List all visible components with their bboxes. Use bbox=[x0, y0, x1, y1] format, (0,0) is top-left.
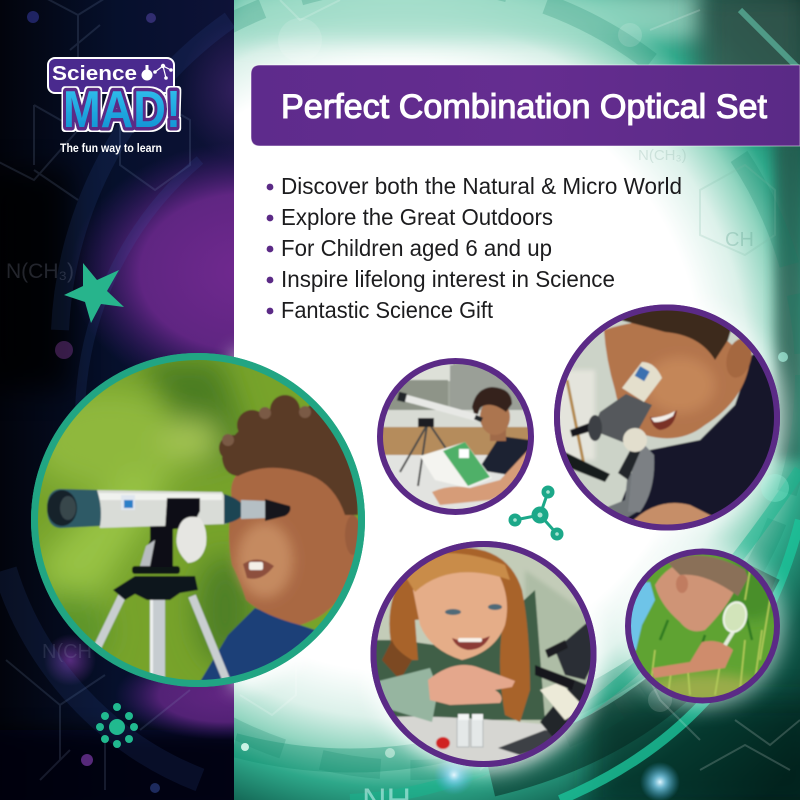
tripod bbox=[400, 425, 447, 486]
microscope bbox=[498, 622, 590, 756]
vials bbox=[457, 719, 469, 747]
logo MAD! wordmark: MAD! bbox=[63, 81, 181, 139]
boy: ear bbox=[345, 514, 358, 554]
sweater bbox=[621, 354, 774, 520]
boy: mouth bbox=[243, 559, 274, 579]
magnifying glass bbox=[725, 632, 733, 645]
table bbox=[396, 715, 547, 761]
panel: glowing right background: N(CH₃) bbox=[638, 147, 687, 164]
booklet bbox=[420, 442, 492, 488]
head bbox=[655, 560, 735, 631]
hand bbox=[428, 665, 515, 705]
photo: boy with magnifying glass in grass bbox=[626, 548, 785, 706]
arm bbox=[652, 641, 733, 678]
ghost formula: N(CH3): N(CH₃) bbox=[6, 260, 74, 283]
photo: boy looking through microscope bbox=[554, 300, 784, 535]
telescope bbox=[398, 396, 478, 418]
boy: hair bbox=[219, 395, 361, 515]
bullet: age: For Children aged 6 and up bbox=[281, 235, 552, 261]
shirt bbox=[631, 580, 656, 652]
red sample bbox=[436, 737, 450, 749]
tagline: The fun way to learn bbox=[60, 143, 162, 155]
back hair bbox=[389, 548, 530, 722]
bullet: natural and micro world: Discover both the Natural & Micro World bbox=[281, 173, 682, 199]
telescope bbox=[47, 489, 290, 563]
mouth bbox=[650, 410, 677, 430]
panel: dark left background bbox=[0, 0, 234, 800]
panel: glowing right background bbox=[234, 0, 800, 800]
face bbox=[604, 320, 750, 438]
bullet: lifelong interest: Inspire lifelong interest in Science bbox=[281, 266, 615, 292]
reader arm bbox=[432, 450, 534, 505]
boy: neck and face bbox=[229, 459, 358, 625]
photo: boy with telescope at table bbox=[378, 358, 540, 515]
white halos behind photo circles bbox=[220, 320, 800, 787]
boy: shirt bbox=[200, 608, 315, 680]
icon: green star bbox=[64, 263, 124, 323]
bullet: gift: Fantastic Science Gift bbox=[281, 297, 494, 323]
boy bbox=[471, 386, 528, 476]
sweater bbox=[375, 590, 545, 720]
title text: Perfect Combination Optical Set bbox=[281, 88, 768, 126]
tripod bbox=[97, 525, 228, 686]
photo: boy with telescope bbox=[30, 350, 370, 690]
bullet list bbox=[267, 173, 682, 323]
ghost formula: N(CH: N(CH bbox=[42, 641, 92, 663]
bullet: great outdoors: Explore the Great Outdoors bbox=[281, 204, 553, 230]
hair bbox=[620, 310, 732, 360]
ear bbox=[726, 338, 753, 378]
photo: girl with microscope bbox=[370, 541, 600, 767]
logo purple badge with Science wordmark: Science bbox=[52, 63, 137, 85]
icon: dot cluster bbox=[96, 703, 138, 748]
sleeve bbox=[375, 668, 438, 722]
face bbox=[413, 566, 507, 660]
icon: molecule bbox=[508, 486, 564, 540]
panel: glowing right background: CH bbox=[725, 229, 754, 251]
microscope bbox=[562, 362, 662, 525]
logo: Science MAD! bbox=[48, 58, 181, 139]
title banner bbox=[251, 65, 800, 146]
